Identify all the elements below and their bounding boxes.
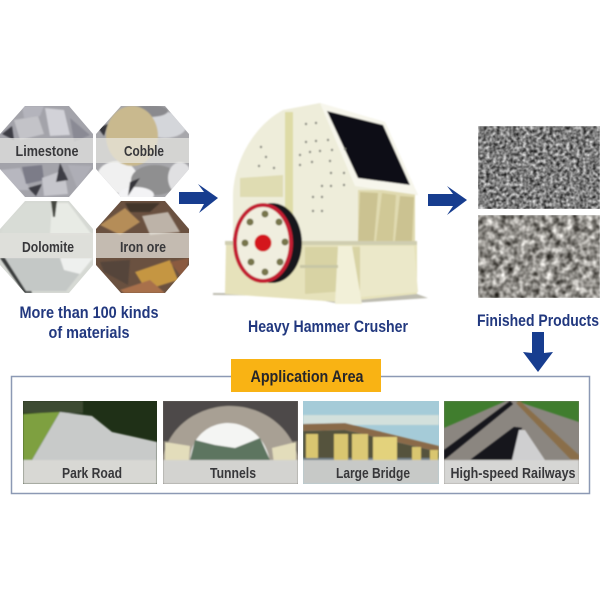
label: limestone: Limestone	[16, 143, 78, 160]
material: limestone	[0, 106, 93, 197]
crusher lower frame	[225, 241, 418, 304]
crusher hopper opening	[327, 111, 410, 185]
crusher bearing bracket	[240, 175, 283, 197]
caption: materials: More than 100 kinds	[20, 303, 158, 322]
material: dolomite	[0, 201, 93, 293]
crusher flywheel	[233, 203, 302, 283]
label: cobble: Cobble	[124, 143, 164, 160]
crusher side flange	[285, 112, 293, 217]
crusher ribs	[358, 190, 415, 245]
material: cobble	[96, 106, 189, 197]
label band: cobble	[96, 138, 189, 163]
material: iron ore	[96, 201, 189, 293]
label band: limestone	[0, 138, 93, 163]
heading: application area: Application Area	[250, 367, 364, 386]
caption: crusher: Heavy Hammer Crusher	[248, 317, 408, 336]
arrow: products to applications	[523, 332, 553, 372]
crusher hopper frame	[320, 103, 418, 195]
application: tunnels	[163, 401, 298, 484]
label: tunnels: Tunnels	[210, 465, 256, 482]
label: dolomite: Dolomite	[22, 239, 74, 256]
heading: application area	[231, 359, 381, 392]
application: high-speed railways	[444, 401, 579, 484]
label band: iron ore	[96, 233, 189, 258]
crusher housing	[233, 103, 418, 245]
caption: materials: of materials	[48, 323, 130, 342]
arrow: materials to crusher	[179, 184, 218, 213]
label: large bridge: Large Bridge	[336, 465, 410, 482]
panel: application area	[12, 376, 590, 494]
product: fine gravel	[478, 126, 600, 209]
crusher base plate	[213, 293, 428, 304]
label: park road: Park Road	[62, 465, 122, 482]
label: high-speed railways: High-speed Railways	[450, 465, 576, 482]
crusher bolts	[258, 122, 346, 212]
label band: dolomite	[0, 233, 93, 258]
application: large bridge	[303, 401, 439, 484]
application: park road	[23, 401, 157, 484]
crusher machine	[213, 103, 428, 304]
product: coarse gravel	[478, 215, 600, 298]
label: iron ore: Iron ore	[120, 239, 166, 256]
arrow: crusher to products	[428, 186, 467, 215]
panel frame	[12, 376, 590, 494]
